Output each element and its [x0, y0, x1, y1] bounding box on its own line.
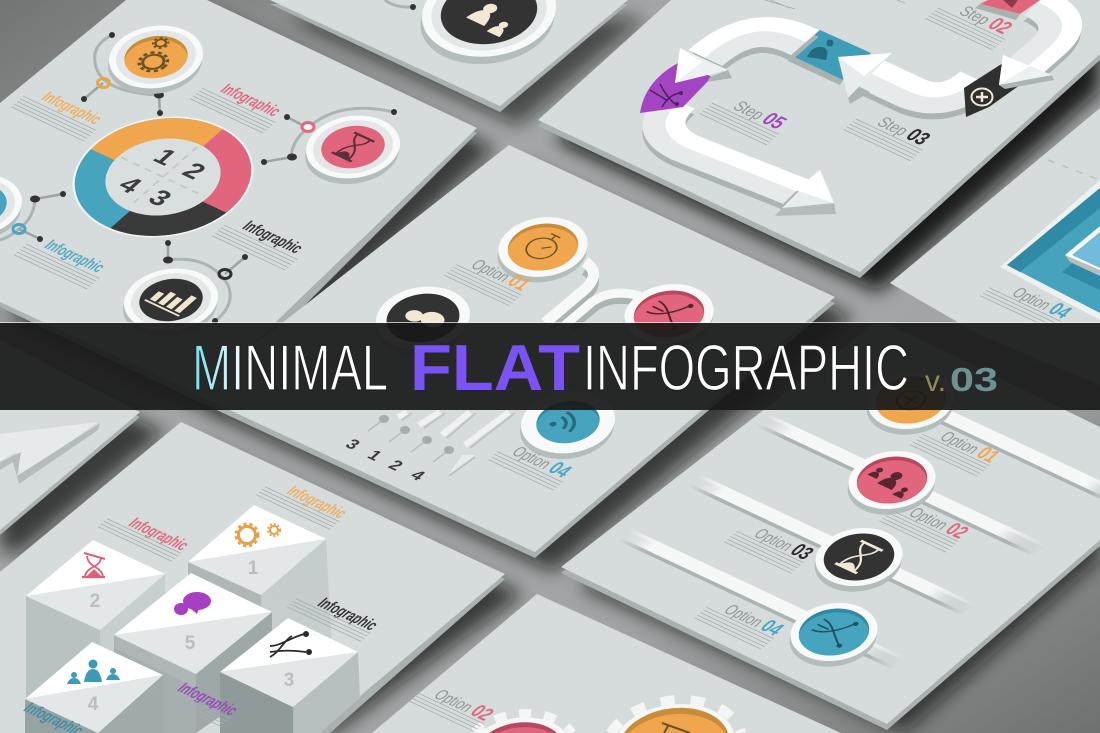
badge: dark people	[389, 0, 588, 81]
connector: orange	[81, 32, 164, 116]
white fork traces	[545, 262, 640, 328]
arrow: step 03 band	[868, 44, 978, 115]
text: orange Infographic: Infographic	[37, 89, 107, 127]
box 2: 2	[90, 591, 100, 612]
panel: arrows sheet	[538, 0, 1100, 278]
text: blue Infographic: Infographic	[40, 237, 110, 275]
donut numbers: 2	[176, 158, 212, 184]
donut numbers: 4	[112, 172, 148, 198]
badge: stopwatch	[498, 217, 588, 282]
connector: blue	[0, 191, 66, 242]
text: purple Infographic	[147, 671, 244, 726]
badge: dark speech bubbles	[352, 275, 493, 367]
text: Option 04	[488, 436, 580, 490]
connector	[385, 0, 416, 10]
version number: 03	[950, 361, 998, 398]
text: Option 02	[407, 677, 501, 732]
text: orange Infographic	[256, 474, 353, 529]
text: Option 01	[444, 249, 539, 306]
text: red Infographic	[98, 506, 195, 561]
connector: dark	[163, 240, 248, 324]
heading: MINIMAL: MINIMAL	[192, 331, 388, 404]
text: purple Infographic: Infographic	[173, 680, 243, 718]
panel: right blue-square sheet	[890, 108, 1100, 385]
arrowhead: step 02	[999, 55, 1054, 89]
slider 3: dark hourglass	[662, 455, 999, 638]
text: dark Infographic: Infographic	[313, 595, 383, 633]
title banner	[0, 322, 1100, 410]
arrow: step 02 band	[988, 0, 1093, 71]
box 1	[188, 505, 332, 700]
text: dark Infographic	[212, 211, 313, 270]
heading: INFOGRAPHIC: INFOGRAPHIC	[583, 331, 909, 404]
text: Option 01: Option 01	[935, 426, 1005, 466]
panel: box chart sheet	[0, 422, 505, 733]
arrow: partial white arrow	[0, 422, 100, 484]
text: Option 04: Option 04	[1007, 282, 1078, 323]
badge: red fork	[624, 284, 714, 338]
text: Option 03: Option 03	[749, 523, 819, 563]
text: Step 05: Step 05	[728, 95, 792, 133]
badge: blue	[0, 162, 45, 254]
arrowhead: step 05	[775, 170, 836, 216]
box 1: 1	[248, 558, 259, 579]
badge: red gear	[474, 714, 572, 733]
text: Option 03	[724, 516, 821, 573]
text: blue Infographic	[14, 230, 115, 289]
badge: orange gear	[611, 700, 741, 733]
text: red Infographic: Infographic	[216, 81, 286, 119]
text: Option 04: Option 04	[507, 441, 578, 482]
text: Step 03	[844, 103, 941, 161]
box 3	[220, 618, 360, 733]
connector: red	[261, 108, 397, 165]
donut numbers: 1	[147, 144, 183, 170]
text: Option 02	[879, 495, 976, 552]
text: dark Infographic	[287, 586, 384, 641]
text: orange Infographic: Infographic	[282, 483, 352, 521]
text: Option 04: Option 04	[719, 599, 790, 640]
fork ends and numbers: 2	[384, 457, 407, 474]
slider 2: red people	[761, 417, 1032, 554]
text: Step 02: Step 02	[954, 0, 1018, 38]
arrowhead: step 03	[838, 53, 892, 104]
box 5: 5	[185, 633, 196, 654]
slider 4: blue fork	[623, 532, 891, 668]
box 5	[114, 573, 272, 733]
badge: orange gears	[108, 26, 203, 94]
text: Option 02: Option 02	[429, 684, 499, 724]
text: Option 04	[980, 273, 1079, 330]
text: dark Infographic: Infographic	[238, 218, 308, 256]
text: Option 02: Option 02	[904, 502, 974, 542]
badge: dark bar chart	[100, 257, 241, 349]
slider 1: orange	[866, 376, 1100, 499]
text: Step 03: Step 03	[872, 111, 936, 149]
arrowhead: step 04	[675, 48, 732, 83]
box 2	[26, 540, 165, 733]
fork ends and numbers	[341, 412, 515, 484]
text: Step 02	[926, 0, 1023, 50]
panel: sliders sheet	[561, 325, 1100, 730]
panel: top sheet	[270, 0, 628, 112]
arrow: step 04 upper band	[697, 7, 812, 89]
panel: ring infographic sheet	[0, 0, 477, 405]
fork ends and numbers: 1	[363, 447, 386, 464]
box 4: 4	[88, 694, 99, 715]
chart: four-part donut	[72, 116, 254, 238]
text lines: top fragments	[765, 0, 905, 9]
fork ends and numbers: 4	[406, 467, 430, 484]
fork ends and numbers: 3	[341, 436, 364, 453]
panel: lower-left arrow sheet	[0, 340, 140, 535]
icon: purple wedge	[640, 62, 712, 113]
badge: blue wifi	[520, 401, 615, 459]
box 4	[25, 642, 163, 733]
arrow: step 05 lower band	[646, 101, 822, 203]
panel: options fork sheet	[193, 145, 835, 558]
version label: v.	[925, 365, 946, 398]
chart: nested blue squares	[1000, 180, 1100, 320]
dashed guide	[1048, 160, 1100, 180]
icon: dark wedge with plus	[964, 63, 1027, 117]
square: red step icon	[975, 0, 1040, 20]
box 3: 3	[284, 670, 294, 691]
text: Option 01	[910, 419, 1007, 476]
panel: gears sheet	[372, 594, 841, 733]
square: blue step icon	[788, 30, 871, 85]
donut numbers	[112, 144, 212, 211]
text: Step 05	[700, 87, 797, 145]
text: Option 01: Option 01	[466, 254, 536, 294]
text: Option 04	[694, 592, 791, 649]
text: red Infographic	[190, 74, 291, 133]
badge: red hourglass	[282, 104, 423, 196]
heading: FLAT: FLAT	[410, 331, 580, 404]
text: orange Infographic	[11, 82, 112, 141]
donut numbers: 3	[142, 185, 178, 211]
text: red Infographic: Infographic	[124, 515, 194, 553]
